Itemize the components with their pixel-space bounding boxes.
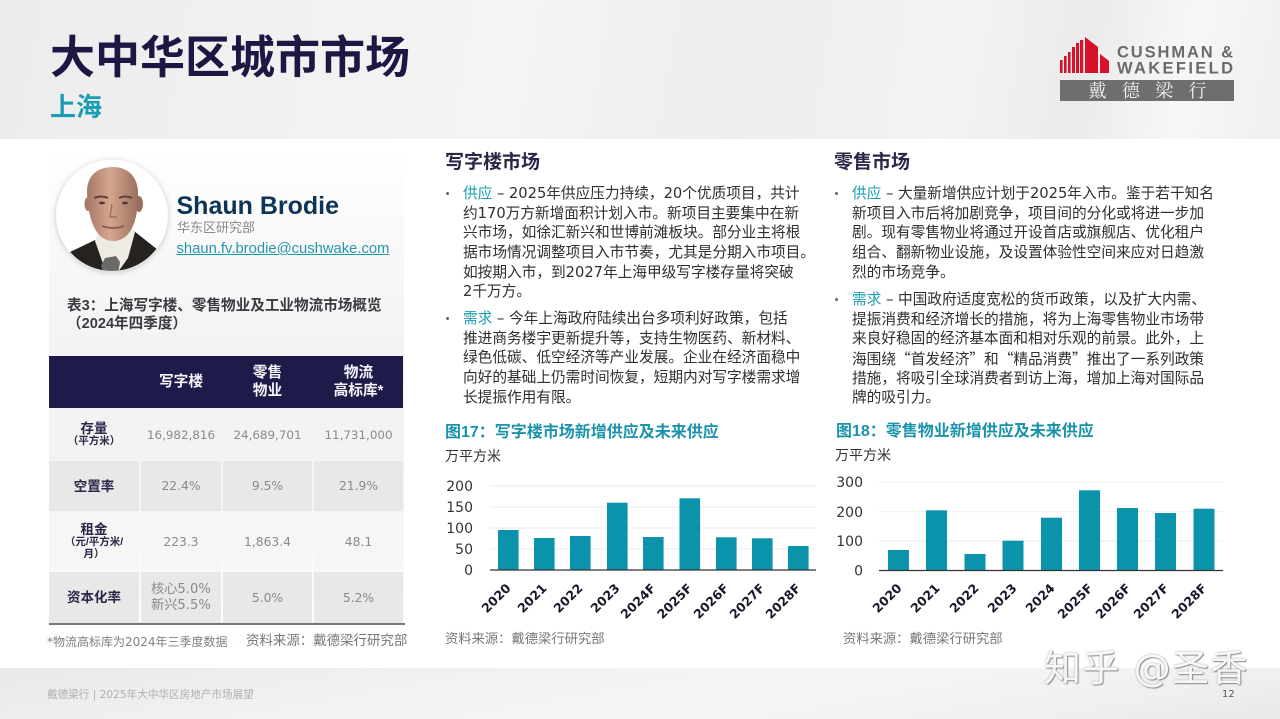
x axis labels: 2026F [690, 581, 732, 622]
figure 17 unit: 万平方米 [445, 449, 501, 465]
x axis labels: 2023 [984, 581, 1020, 616]
table title: （2024年四季度） [67, 316, 187, 332]
x axis labels [478, 580, 804, 622]
logo: Cushman & Wakefield [1060, 37, 1234, 101]
y axis labels: 0 [854, 564, 863, 580]
bullet: retail supply: 剧。现有零售物业将通过开设首店或旗舰店、优化租户 [852, 224, 1204, 241]
author department: 华东区研究部 [177, 221, 255, 236]
x axis labels: 2028F [762, 581, 804, 622]
x axis labels: 2025F [1054, 581, 1096, 622]
table title: 表3：上海写字楼、零售物业及工业物流市场概览 [67, 298, 382, 314]
logo chinese name band: 戴德梁行 [1088, 80, 1206, 101]
x axis labels: 2027F [726, 581, 768, 622]
y axis labels [446, 479, 473, 579]
table source: 资料来源：戴德梁行研究部 [246, 634, 407, 649]
row: 存量: 16,982,816 [147, 428, 215, 442]
x axis labels: 2022 [946, 581, 982, 616]
row: 租金: 1,863.4 [244, 534, 291, 548]
header band background [0, 0, 1280, 139]
icon: red building bars [1060, 37, 1109, 73]
logo wordmark [1117, 44, 1233, 78]
row: 租金 [65, 522, 372, 560]
bullet: retail supply [835, 185, 1214, 281]
bullet: retail demand: 提振消费和经济增长的措施，将为上海零售物业市场带 [852, 311, 1204, 328]
bullet: retail demand [835, 291, 1206, 406]
y axis labels: 50 [455, 542, 473, 558]
figure 17 title: 图17：写字楼市场新增供应及未来供应 [445, 424, 719, 441]
row: 空置率: 21.9% [339, 479, 378, 493]
bullet: retail demand: 牌的吸引力。 [852, 389, 940, 406]
row: 租金: 租金 [80, 522, 108, 536]
table header row: 写字楼 [159, 374, 203, 390]
logo wordmark: CUSHMAN & [1117, 44, 1233, 62]
icon: portrait photo [54, 158, 170, 276]
table title [67, 297, 382, 332]
x axis labels [869, 580, 1210, 622]
author name: Shaun Brodie [176, 192, 339, 220]
table header row [49, 356, 403, 408]
row: 租金: 48.1 [345, 534, 372, 548]
footer band background [0, 668, 1280, 719]
bullet: office demand [446, 310, 800, 406]
x axis labels: 2020 [869, 580, 905, 616]
bullet: office supply: 据市场情况调整项目入市节奏，尤其是分期入市项目。 [463, 244, 815, 261]
row: 空置率: 9.5% [252, 479, 283, 493]
row: 租金: 223.3 [163, 534, 199, 548]
y axis labels [836, 475, 863, 580]
bullet: retail supply: 组合、翻新物业设施，及设置体验性空间来应对日趋激 [852, 244, 1204, 261]
x axis labels: 2024 [1022, 580, 1058, 616]
title: 大中华区城市市场 [50, 32, 410, 83]
row: 资本化率 [49, 572, 403, 623]
y axis labels: 200 [446, 479, 473, 495]
x axis labels: 2025F [654, 581, 695, 622]
row: 存量 [68, 421, 393, 447]
row: 存量: 24,689,701 [233, 428, 302, 442]
y axis labels: 100 [836, 534, 863, 550]
bullet: retail demand: 来良好稳固的经济基本面和相对乐观的前景。此外，上 [852, 330, 1204, 347]
table header row: 零售 [253, 364, 282, 380]
x axis labels: 2022 [550, 581, 586, 616]
row: 租金: 月） [84, 548, 104, 560]
footer text: 戴德梁行 | 2025年大中华区房地产市场展望 [47, 689, 254, 701]
row: 存量: 存量 [80, 421, 108, 436]
table header row: 物业 [253, 383, 282, 399]
heading: office market: 写字楼市场 [445, 152, 540, 173]
x axis labels: 2026F [1092, 581, 1134, 622]
table: market overview [49, 356, 405, 625]
row: 存量: 11,731,000 [324, 428, 393, 442]
x axis labels: 2021 [514, 581, 550, 616]
table header row: 高标库* [334, 383, 383, 399]
logo wordmark: WAKEFIELD [1117, 60, 1233, 78]
bullet: office demand: 需求 – 今年上海政府陆续出台多项利好政策，包括 [463, 310, 788, 327]
row: 空置率: 22.4% [161, 479, 201, 493]
x axis labels: 2020 [478, 580, 514, 616]
bar chart: office supply [446, 479, 816, 622]
row: 资本化率: 5.0% [252, 590, 283, 604]
x axis labels: 2024F [617, 581, 659, 622]
logo chinese name band [1060, 80, 1234, 101]
x axis labels: 2023 [587, 581, 623, 616]
bullet: office supply: 约170万方新增面积计划入市。新项目主要集中在新 [463, 205, 799, 222]
watermark: 知乎 @圣香 [1044, 647, 1249, 690]
bullet: retail demand: 海围绕“首发经济”和“精品消费”推出了一系列政策 [852, 348, 1204, 369]
table header row: 物流 [344, 364, 373, 380]
bullet: office demand: 绿色低碳、低空经济等产业发展。企业在经济面稳中 [463, 349, 800, 366]
row: 空置率 [49, 461, 403, 511]
bullet: office supply: 2千万方。 [463, 283, 531, 300]
bullet: retail supply: 新项目入市后将加剧竞争，项目间的分化或将进一步加 [852, 205, 1204, 222]
bullet: office demand: 推进商务楼宇更新提升等，支持生物医药、新材料、 [463, 330, 800, 347]
bullet: office supply: 兴市场，如徐汇新兴和世博前滩板块。部分业主将根 [463, 224, 800, 241]
x axis labels: 2021 [907, 581, 943, 616]
bullet: retail demand: 需求 – 中国政府适度宽松的货币政策，以及扩大内需、 [852, 291, 1206, 308]
bullet: office supply: 供应 – 2025年供应压力持续，20个优质项目，共计 [463, 185, 800, 202]
y axis labels: 0 [464, 563, 473, 579]
page number: 12 [1222, 689, 1235, 700]
bullet: retail supply: 供应 – 大量新增供应计划于2025年入市。鉴于若干知名 [852, 185, 1214, 202]
y axis labels: 150 [446, 500, 473, 516]
x axis labels: 2027F [1130, 581, 1172, 622]
bullet: office supply: 如按期入市，到2027年上海甲级写字楼存量将突破 [463, 264, 794, 281]
subtitle: 上海 [50, 92, 102, 122]
figure 18 unit: 万平方米 [835, 448, 891, 464]
bullet: retail demand: 措施，将吸引全球消费者到访上海，增加上海对国际品 [852, 370, 1204, 387]
heading: retail market: 零售市场 [834, 152, 910, 173]
figure 18 source: 资料来源：戴德梁行研究部 [843, 632, 1003, 647]
text block: office market [446, 185, 815, 406]
row: 存量: （平方米） [68, 435, 120, 447]
row: 空置率: 空置率 [74, 478, 114, 494]
bars [888, 490, 1214, 570]
row: 资本化率: 核心5.0% [151, 582, 211, 596]
row: 资本化率: 资本化率 [67, 590, 121, 605]
text block: retail market [835, 185, 1214, 406]
y axis labels: 100 [446, 521, 473, 537]
figure 17 source: 资料来源：戴德梁行研究部 [445, 632, 605, 647]
panel: left table panel [49, 150, 404, 650]
figure 18 title: 图18：零售物业新增供应及未来供应 [836, 423, 1094, 440]
table footnote: *物流高标库为2024年三季度数据 [47, 635, 228, 649]
row: 租金: （元/平方米/ [65, 536, 123, 548]
row: 资本化率: 5.2% [343, 590, 374, 604]
bullet: office demand: 向好的基础上仍需时间恢复，短期内对写字楼需求增 [463, 369, 800, 386]
bullet: office demand: 长提振作用有限。 [463, 389, 580, 406]
bullet: retail supply: 烈的市场竞争。 [852, 264, 955, 281]
bars [498, 498, 809, 570]
y axis labels: 300 [836, 475, 863, 491]
bar chart: retail supply [836, 475, 1223, 622]
row: 资本化率: 新兴5.5% [151, 598, 211, 612]
author email: shaun.fv.brodie@cushwake.com [176, 241, 389, 257]
bullet: office supply [446, 185, 815, 300]
y axis labels: 200 [836, 505, 863, 521]
x axis labels: 2028F [1168, 581, 1210, 622]
